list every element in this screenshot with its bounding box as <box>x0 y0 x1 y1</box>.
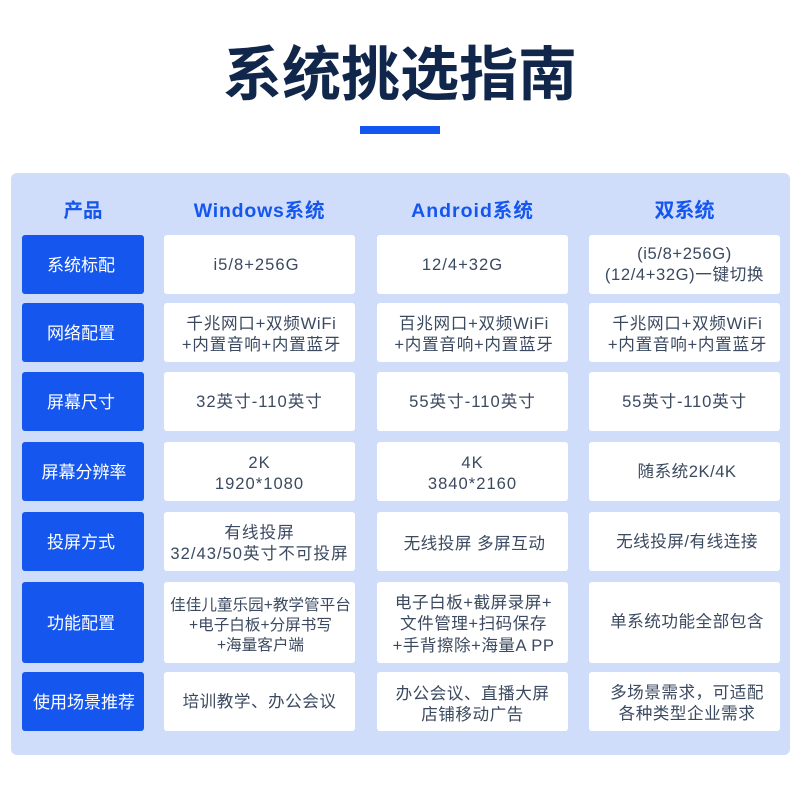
cell: dual screen size: 55英寸-110英寸 <box>622 392 747 411</box>
cell: Android network <box>377 303 568 362</box>
cell: Windows standard configuration: i5/8+256G <box>213 255 300 274</box>
row label: screen resolution <box>22 442 144 501</box>
cell: Android resolution: 4K <box>461 452 484 472</box>
row label: screen resolution: 屏幕分辨率 <box>42 463 126 482</box>
cell: dual network: +内置音响+内置蓝牙 <box>608 334 767 354</box>
row label: network configuration <box>22 303 144 362</box>
row label: casting method: 投屏方式 <box>47 533 115 552</box>
cell: Windows features: +电子白板+分屏书写 <box>189 617 332 634</box>
column heading: product: 产品 <box>63 200 102 222</box>
cell: Android screen size: 55英寸-110英寸 <box>409 392 536 411</box>
cell: Windows screen size <box>164 372 355 431</box>
cell: Windows standard configuration <box>164 235 355 294</box>
title: 系统挑选指南 <box>223 42 577 108</box>
cell: Windows casting: 32/43/50英寸不可投屏 <box>170 544 349 562</box>
column heading: Windows: Windows系统 <box>194 200 325 222</box>
cell: Android resolution: 3840*2160 <box>428 474 517 492</box>
cell: Windows screen size: 32英寸-110英寸 <box>196 392 323 411</box>
cell: Android scenarios: 办公会议、直播大屏 <box>396 684 549 703</box>
cell: dual network: 千兆网口+双频WiFi <box>612 314 763 332</box>
cell: Windows scenarios <box>164 672 355 731</box>
cell: Windows network <box>164 303 355 362</box>
cell: Windows scenarios: 培训教学、办公会议 <box>183 692 336 711</box>
row label: screen size: 屏幕尺寸 <box>47 393 115 412</box>
cell: dual screen size <box>589 372 780 431</box>
cell: Android standard configuration <box>377 235 568 294</box>
cell: Android network: +内置音响+内置蓝牙 <box>394 334 554 354</box>
cell: dual standard configuration: (i5/8+256G) <box>637 244 732 262</box>
row label: features: 功能配置 <box>47 614 115 633</box>
row label: standard configuration <box>22 235 144 294</box>
cell: Android features: 文件管理+扫码保存 <box>400 614 547 633</box>
cell: Android scenarios: 店铺移动广告 <box>421 705 524 724</box>
cell: dual standard configuration <box>589 235 780 294</box>
cell: Android features: 电子白板+截屏录屏+ <box>395 593 552 612</box>
cell: dual resolution <box>589 442 780 501</box>
cell: Windows resolution: 2K <box>248 452 271 472</box>
cell: Android features <box>377 582 568 663</box>
cell: Android resolution <box>377 442 568 501</box>
cell: Android scenarios <box>377 672 568 731</box>
row label: screen size <box>22 372 144 431</box>
row label: casting method <box>22 512 144 571</box>
cell: Windows features <box>164 582 355 663</box>
cell: dual standard configuration: (12/4+32G)一键切换 <box>605 264 764 284</box>
column heading: dual system: 双系统 <box>654 200 714 222</box>
cell: Windows casting: 有线投屏 <box>224 522 295 542</box>
cell: Windows network: +内置音响+内置蓝牙 <box>182 334 341 354</box>
cell: Android features: +手背擦除+海量A PP <box>393 636 554 655</box>
cell: Android casting: 无线投屏 多屏互动 <box>404 534 545 553</box>
cell: dual network <box>589 303 780 362</box>
row label: recommended scenarios <box>22 672 144 731</box>
cell: Windows resolution <box>164 442 355 501</box>
cell: dual scenarios: 多场景需求，可适配 <box>610 682 764 702</box>
title accent bar <box>360 126 440 134</box>
cell: Windows network: 千兆网口+双频WiFi <box>186 314 337 332</box>
cell: dual casting <box>589 512 780 571</box>
panel: comparison table <box>11 173 790 755</box>
row label: recommended scenarios: 使用场景推荐 <box>33 693 135 712</box>
cell: dual scenarios: 各种类型企业需求 <box>619 704 755 722</box>
cell: dual scenarios <box>589 672 780 731</box>
cell: Windows resolution: 1920*1080 <box>215 474 304 492</box>
column heading: Android: Android系统 <box>411 200 534 222</box>
cell: dual casting: 无线投屏/有线连接 <box>616 532 758 551</box>
cell: Windows casting <box>164 512 355 571</box>
cell: dual features <box>589 582 780 663</box>
cell: Android network: 百兆网口+双频WiFi <box>399 314 549 332</box>
cell: Android standard configuration: 12/4+32G <box>422 255 503 274</box>
row label: standard configuration: 系统标配 <box>47 256 115 275</box>
cell: dual resolution: 随系统2K/4K <box>638 462 736 481</box>
cell: Android casting <box>377 512 568 571</box>
cell: Windows features: +海量客户端 <box>217 637 304 654</box>
row label: features <box>22 582 144 663</box>
row label: network configuration: 网络配置 <box>47 324 115 343</box>
cell: Android screen size <box>377 372 568 431</box>
cell: dual features: 单系统功能全部包含 <box>610 612 764 631</box>
cell: Windows features: 佳佳儿童乐园+教学管平台 <box>170 597 351 614</box>
